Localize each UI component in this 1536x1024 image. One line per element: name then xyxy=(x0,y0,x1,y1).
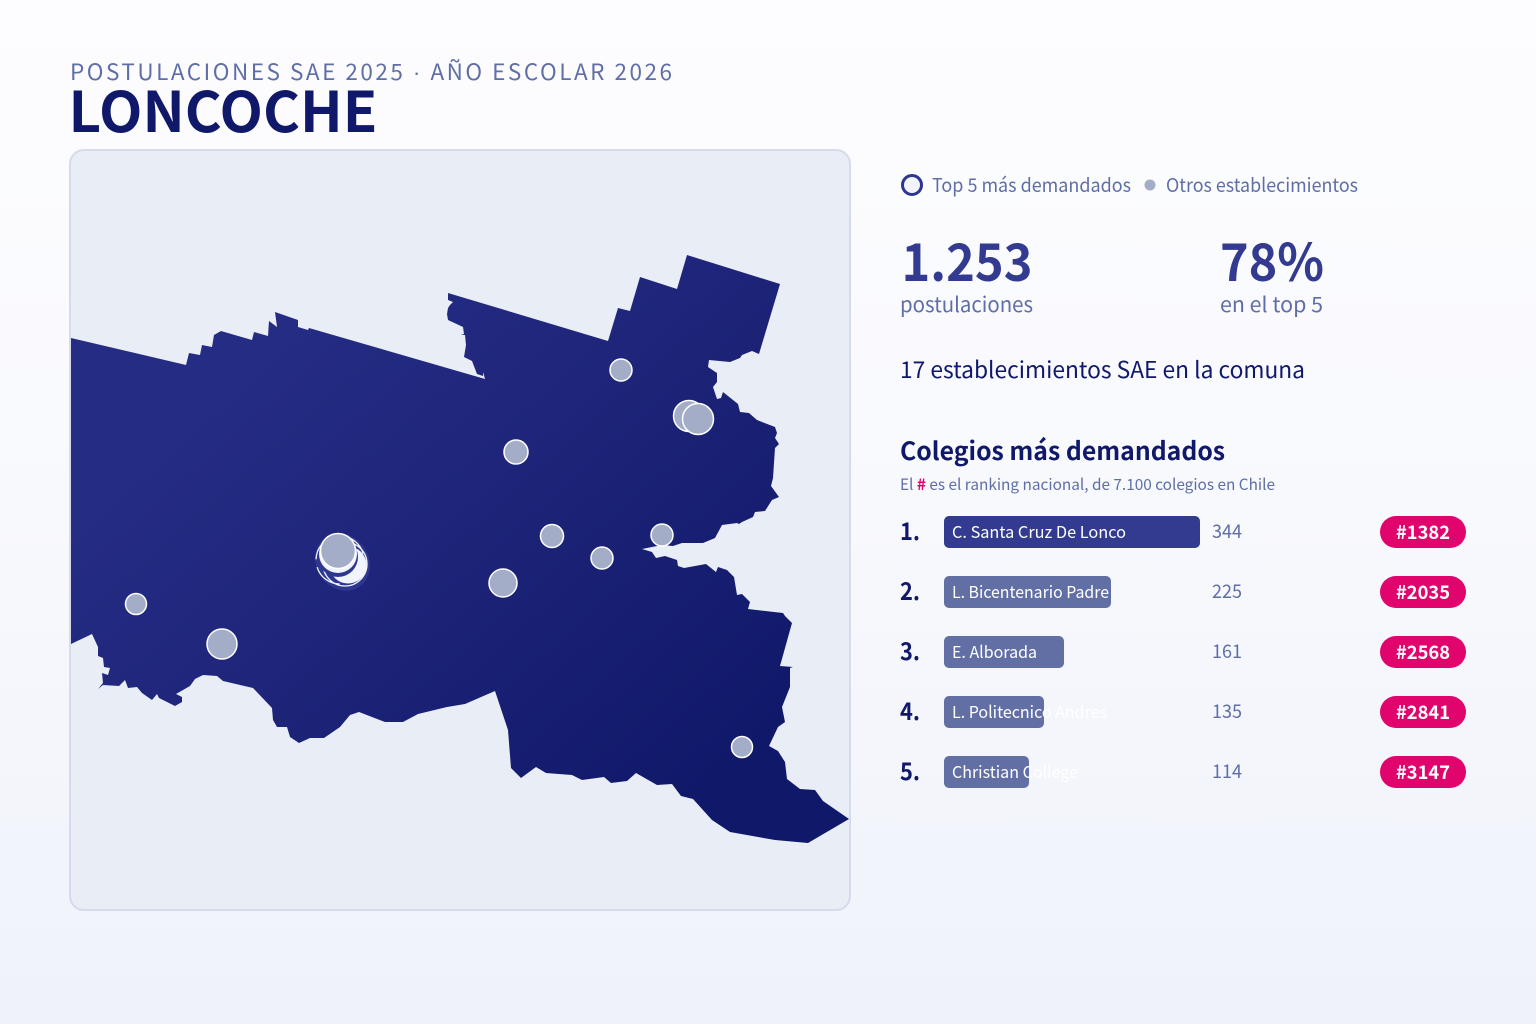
ranking note: El # es el ranking nacional, de 7.100 colegios en Chile xyxy=(900,473,1275,495)
ranking row 2: 2. xyxy=(900,572,920,607)
stat: top 5 share: 78% xyxy=(1220,221,1324,296)
ranking row 5: #3147 xyxy=(1396,758,1450,785)
ranking row 3: 161 xyxy=(1212,637,1242,664)
ranking row 1 xyxy=(900,512,1466,548)
ranking row 2: L. Bicentenario Padre xyxy=(952,579,1109,603)
stat: top 5 share: en el top 5 xyxy=(1220,289,1323,319)
map: comuna shape xyxy=(71,255,849,843)
ranking row 5 xyxy=(900,752,1466,788)
stat: postulaciones: postulaciones xyxy=(900,289,1033,319)
ranking heading: Colegios más demandados xyxy=(900,432,1225,468)
ranking row 4: L. Politecnico Andres xyxy=(952,699,1107,723)
stat: postulaciones: 1.253 xyxy=(902,221,1032,296)
markers: other schools xyxy=(126,359,752,758)
ranking row 5: 114 xyxy=(1212,757,1242,784)
legend: Top 5 más demandados xyxy=(932,171,1131,198)
title: LONCOCHE xyxy=(68,68,378,149)
header xyxy=(68,55,672,149)
legend xyxy=(902,171,1358,198)
markers: top 5 cluster xyxy=(304,523,381,601)
panel: map xyxy=(70,150,850,910)
establishments count: 17 establecimientos SAE en la comuna xyxy=(900,351,1305,385)
ranking row 1: 344 xyxy=(1212,517,1242,544)
ranking row 4: 4. xyxy=(900,692,920,727)
legend: Otros establecimientos xyxy=(1166,171,1358,198)
ranking row 1: #1382 xyxy=(1396,518,1450,545)
ranking row 3 xyxy=(900,632,1466,668)
ranking row 2 xyxy=(900,572,1466,608)
ranking row 2: #2035 xyxy=(1396,578,1450,605)
ranking row 4 xyxy=(900,692,1466,728)
ranking row 5: Christian College xyxy=(952,759,1078,783)
ranking row 3: E. Alborada xyxy=(952,639,1037,663)
ranking row 3: #2568 xyxy=(1396,638,1450,665)
eyebrow heading: POSTULACIONES SAE 2025 · AÑO ESCOLAR 2026 xyxy=(70,55,672,87)
ranking row 4: 135 xyxy=(1212,697,1242,724)
ranking row 2: 225 xyxy=(1212,577,1242,604)
ranking row 1: 1. xyxy=(900,512,920,547)
ranking row 3: 3. xyxy=(900,632,920,667)
ranking row 5: 5. xyxy=(900,752,920,787)
ranking row 4: #2841 xyxy=(1396,698,1450,725)
ranking row 1: C. Santa Cruz De Lonco xyxy=(952,519,1126,543)
